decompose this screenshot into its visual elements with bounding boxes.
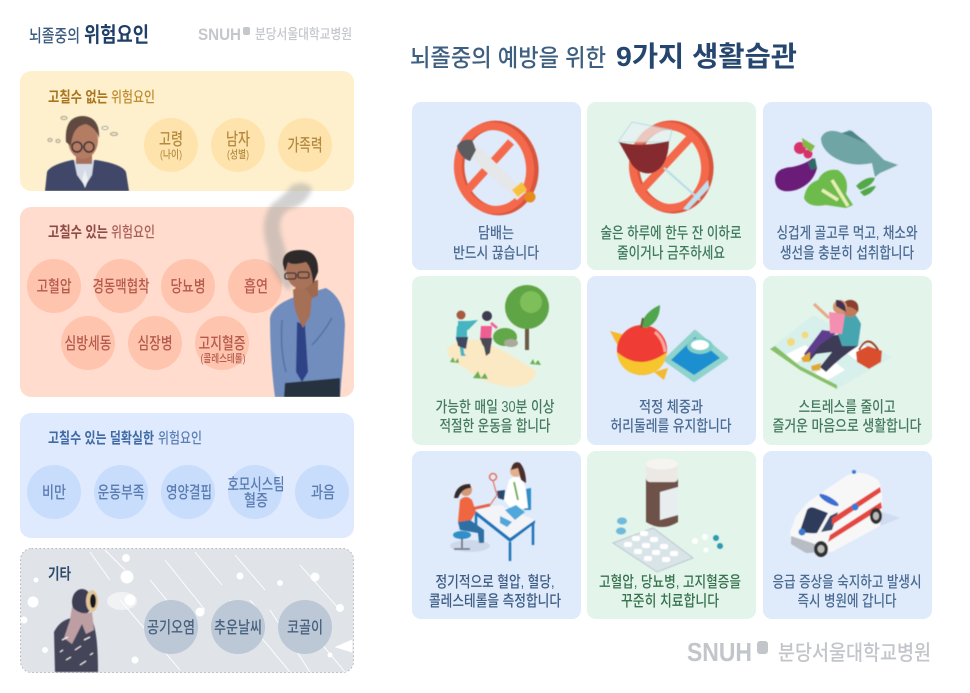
- risk factor: diabetes: [161, 259, 215, 313]
- risk factor: obesity: [27, 465, 81, 519]
- caption: 꾸준히 치료합니다: [621, 592, 719, 610]
- icon: pills and bottle: [613, 458, 723, 572]
- risk factor: carotid stenosis: 경동맥협착: [92, 277, 150, 296]
- illustration: worried elderly man: [45, 116, 129, 191]
- panel: non-modifiable risk factors: [20, 71, 354, 191]
- caption: 술은 하루에 한두 잔 이하로: [600, 224, 742, 242]
- risk factor: age: (나이): [160, 148, 182, 161]
- risk factor: family history: 가족력: [288, 136, 322, 155]
- caption: 스트레스를 줄이고: [798, 398, 896, 416]
- risk factor: age: [144, 118, 198, 172]
- panel heading: 기타: [48, 565, 71, 583]
- risk factor: age: 고령: [159, 130, 183, 149]
- main title: 뇌졸중의 예방을 위한: [410, 45, 606, 72]
- icon: ambulance: [790, 470, 900, 557]
- risk factor: heart disease: [128, 316, 182, 370]
- risk factor: hypertension: [27, 259, 81, 313]
- caption: 반드시 끊습니다: [453, 244, 539, 262]
- icon: no alcohol: [618, 121, 713, 213]
- panel heading: [48, 224, 155, 241]
- caption: 즉시 병원에 갑니다: [798, 592, 896, 610]
- logo: SNUH bottom: 분당서울대학교병원: [778, 642, 931, 665]
- caption: [776, 224, 918, 262]
- illustration: person in snow: [54, 589, 98, 672]
- risk factor: drinking: 과음: [311, 483, 335, 502]
- risk factor: air pollution: 공기오염: [147, 618, 195, 637]
- caption: 싱겁게 골고루 먹고, 채소와: [776, 224, 918, 242]
- risk factor: snoring: 코골이: [287, 618, 323, 637]
- risk factor: sex: [211, 118, 265, 172]
- main title: [410, 41, 797, 72]
- risk factor: homocysteinemia: 혈증: [244, 491, 268, 510]
- card: limit alcohol: [587, 102, 756, 270]
- risk factor: atrial fibrillation: 심방세동: [64, 334, 112, 353]
- risk factor: hyperlipidemia: (콜레스테롤): [200, 352, 246, 365]
- logo: SNUH bottom: [687, 637, 931, 667]
- risk factor: sex: 남자: [226, 130, 250, 149]
- panel heading: 고칠수 있는: [48, 224, 108, 241]
- left title: 위험요인: [84, 24, 149, 47]
- card: treatment: [587, 451, 756, 619]
- risk factor: obesity: 비만: [42, 483, 66, 502]
- logo: SNUH top: [198, 25, 352, 44]
- caption: [600, 224, 742, 262]
- icon: no smoking: [453, 120, 540, 216]
- logo: SNUH top: 분당서울대학교병원: [255, 26, 352, 42]
- risk factor: cold weather: [211, 600, 265, 654]
- risk factor: family history: [278, 118, 332, 172]
- caption: 응급 증상을 숙지하고 발생시: [772, 573, 922, 591]
- snowfall background: [21, 550, 352, 672]
- panel heading: [48, 89, 155, 106]
- panel heading: 고칠수 없는: [48, 89, 108, 106]
- risk factor: smoking: 흡연: [244, 277, 268, 296]
- card: emergency care: [763, 451, 932, 619]
- caption: [453, 224, 539, 262]
- caption: 줄이거나 금주하세요: [617, 244, 725, 262]
- caption: [610, 398, 732, 435]
- logo: SNUH top: SNUH: [198, 25, 241, 44]
- caption: 정기적으로 혈압, 혈당,: [436, 573, 554, 591]
- risk factor: carotid stenosis: [92, 259, 150, 313]
- risk factor: smoking: [228, 259, 282, 313]
- caption: 고혈압, 당뇨병, 고지혈증을: [599, 573, 741, 591]
- left title: 뇌졸중의: [29, 26, 80, 46]
- risk factor: malnutrition: [161, 465, 215, 519]
- risk factor: hypertension: 고혈압: [36, 277, 72, 296]
- risk factor: homocysteinemia: 호모시스팀: [228, 475, 284, 494]
- card: quit smoking: [412, 102, 581, 270]
- caption: [772, 398, 922, 435]
- panel heading: 위험요인: [111, 224, 155, 241]
- panel: other risk factors: [20, 548, 354, 672]
- caption: [429, 573, 561, 610]
- main title: 9가지 생활습관: [616, 41, 797, 72]
- card: balanced diet: [763, 102, 932, 270]
- risk factor: air pollution: [144, 600, 198, 654]
- caption: [599, 573, 741, 610]
- panel heading: 고칠수 있는 덜확실한: [48, 430, 154, 447]
- panel: modifiable risk factors: [20, 183, 354, 397]
- card: reduce stress: [763, 276, 932, 445]
- icon: blood pressure check: [450, 462, 535, 561]
- risk factor: malnutrition: 영양결핍: [166, 483, 212, 502]
- risk factor: drinking: [295, 465, 349, 519]
- caption: 적정 체중과: [639, 398, 703, 416]
- risk factor: homocysteinemia: [228, 465, 284, 519]
- risk factor: lack of exercise: 운동부족: [98, 483, 144, 502]
- card: weight control: [587, 276, 756, 445]
- risk factor: hyperlipidemia: [195, 316, 249, 370]
- caption: 즐거운 마음으로 생활합니다: [772, 417, 922, 435]
- icon: couple on picnic blanket: [770, 300, 892, 389]
- risk factor: hyperlipidemia: 고지혈증: [198, 334, 246, 353]
- caption: 생선을 충분히 섭취합니다: [780, 244, 914, 262]
- icon: joggers and tree: [447, 285, 549, 387]
- caption: [772, 573, 922, 610]
- caption: [436, 398, 554, 435]
- risk factor: atrial fibrillation: [61, 316, 115, 370]
- card: regular checkups: [412, 451, 581, 619]
- icon: fish and vegetables: [775, 130, 898, 208]
- left title: [29, 24, 149, 47]
- caption: 콜레스테롤을 측정합니다: [429, 592, 561, 610]
- panel: modifiable risk factors with less evidence: [20, 413, 354, 538]
- risk factor: sex: (성별): [227, 148, 249, 161]
- risk factor: snoring: [278, 600, 332, 654]
- caption: 담배는: [478, 224, 514, 242]
- illustration: smoke: [264, 183, 312, 290]
- logo: SNUH bottom: SNUH: [687, 637, 752, 667]
- caption: 적절한 운동을 합니다: [440, 417, 550, 435]
- card: exercise: [412, 276, 581, 445]
- risk factor: cold weather: 추운날씨: [214, 618, 262, 637]
- panel heading: 위험요인: [111, 89, 155, 106]
- caption: 허리둘레를 유지합니다: [610, 417, 732, 435]
- icon: apple and scale: [610, 305, 726, 380]
- illustration: smoking man: [270, 250, 345, 397]
- risk factor: diabetes: 당뇨병: [170, 277, 206, 296]
- risk factor: lack of exercise: [94, 465, 148, 519]
- caption: 가능한 매일 30분 이상: [436, 398, 554, 416]
- risk factor: heart disease: 심장병: [138, 334, 172, 353]
- panel heading: 위험요인: [158, 430, 202, 447]
